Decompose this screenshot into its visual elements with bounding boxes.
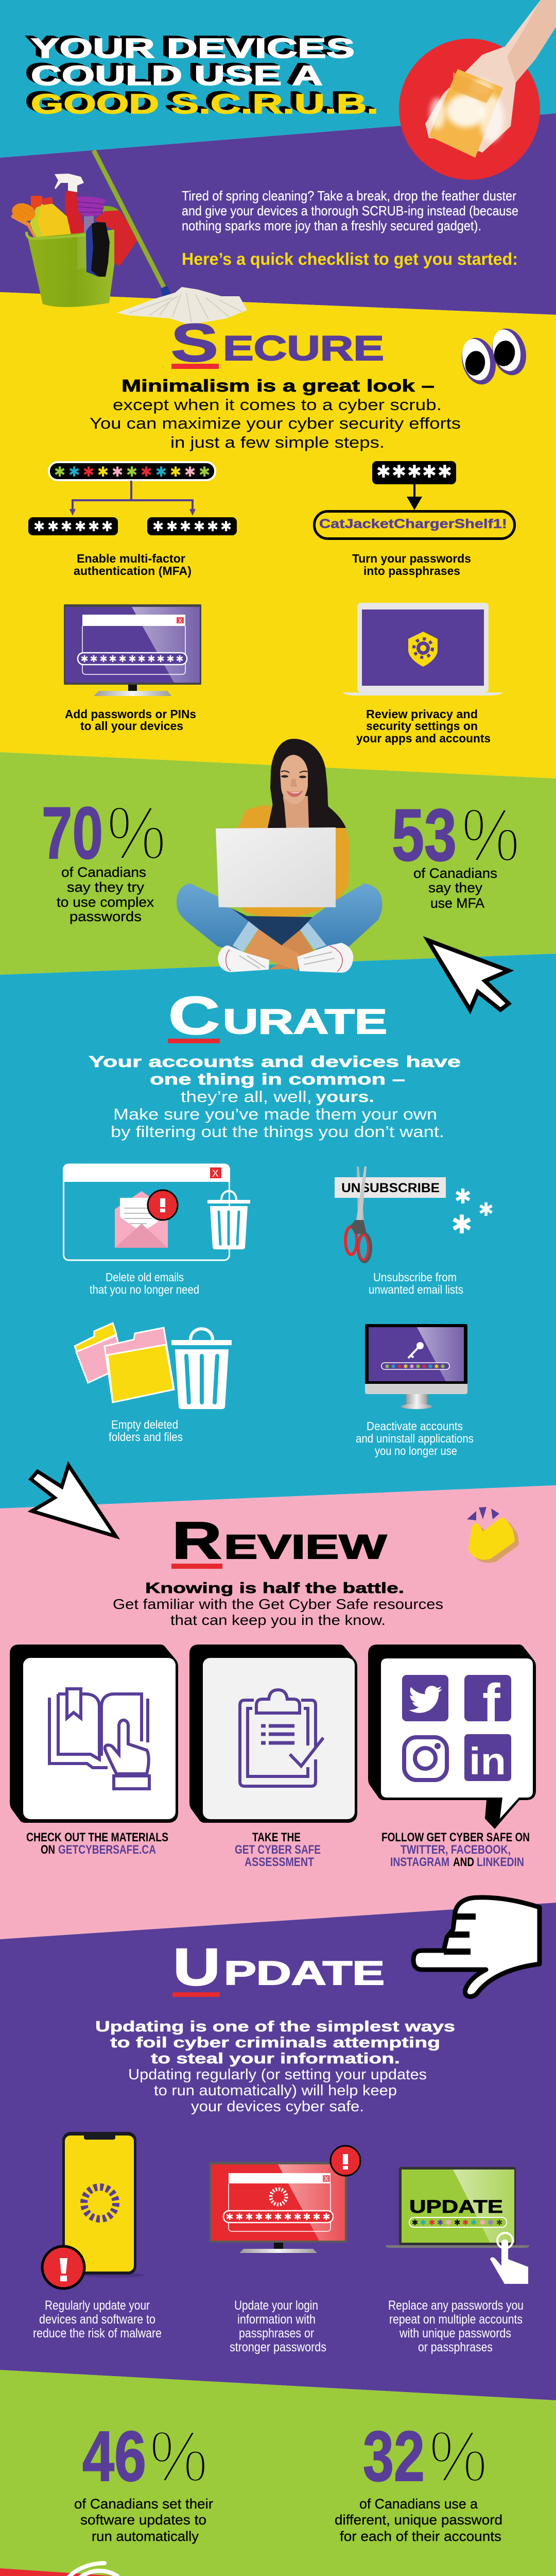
curate intro text: one thing in common – — [150, 1070, 405, 1088]
heading: secure: ECURE — [223, 329, 384, 368]
label: update login: information with — [237, 2312, 316, 2327]
icon: facebook — [464, 1673, 511, 1733]
label: assessment: GET CYBER SAFE — [235, 1843, 321, 1857]
heading: secure — [171, 313, 384, 373]
card: assessment clipboard — [189, 1645, 357, 1823]
label: delete old emails — [90, 1270, 199, 1296]
stat: 53 percent: % — [461, 793, 520, 878]
label: materials: CHECK OUT THE MATERIALS — [26, 1831, 168, 1844]
update intro text: your devices cyber safe. — [191, 2098, 364, 2115]
icon: scissors cutting unsubscribe: ✱ — [451, 1210, 473, 1240]
stat: 53 percent: 53 — [392, 794, 457, 876]
stat: 32 percent — [335, 2416, 502, 2544]
icon: fingerprint — [61, 2563, 145, 2576]
label: deactivate accounts: Deactivate accounts — [367, 1419, 463, 1433]
label: update login: passphrases or — [239, 2326, 314, 2341]
icon: laptop with update and touch hand: UPDATE — [409, 2197, 503, 2217]
secure intro text: in just a few simple steps. — [170, 433, 385, 451]
illustration: woman sitting with laptop — [177, 739, 383, 973]
icon: password to passphrase: CatJacketChargerShelf1! — [319, 517, 507, 531]
curate intro text: Make sure you’ve made them your own — [113, 1105, 437, 1123]
heading: review — [171, 1511, 387, 1570]
icon: multi-factor authentication — [28, 462, 237, 535]
label: follow on social — [381, 1831, 530, 1869]
label: unsubscribe: unwanted email lists — [369, 1283, 463, 1296]
label: update devices: reduce the risk of malware — [33, 2326, 162, 2341]
label: materials: ON — [41, 1843, 55, 1857]
label: empty folders: Empty deleted — [111, 1418, 178, 1431]
heading: curate: C — [168, 986, 220, 1046]
icon: linkedin: in — [469, 1740, 506, 1783]
stat: 70 percent: to use complex — [57, 894, 154, 910]
icon: password to passphrase: ✱✱✱✱✱ — [376, 462, 452, 482]
icon: pointing hand — [413, 1897, 540, 1996]
stat: 53 percent: use MFA — [430, 895, 484, 911]
icon: delete email window with trash: X — [212, 1168, 219, 1179]
icon: clipboard with check — [240, 1690, 323, 1786]
panel: curate — [63, 986, 494, 1458]
heading: secure: S — [171, 313, 218, 373]
intro callout: Here’s a quick checklist to get you started: — [182, 249, 518, 268]
label: review privacy — [356, 707, 491, 745]
illustration: mop — [94, 150, 247, 325]
label: review privacy: Review privacy and — [366, 707, 478, 721]
stat: 70 percent — [42, 791, 166, 924]
label: assessment: ASSESSMENT — [245, 1855, 314, 1869]
stat: 32 percent: different, unique password — [335, 2512, 502, 2528]
stat: 70 percent: % — [107, 791, 166, 876]
stat: 32 percent: of Canadians use a — [359, 2496, 478, 2512]
label: replace passwords: with unique passwords — [399, 2326, 511, 2341]
label: follow on social: INSTAGRAM — [390, 1855, 449, 1869]
icon: twitter — [402, 1675, 448, 1721]
stat: 46 percent: % — [149, 2416, 208, 2498]
label: add passwords — [65, 707, 196, 733]
illustration: bucket of cleaning supplies — [10, 174, 141, 307]
label: follow on social: TWITTER, FACEBOOK, — [401, 1843, 511, 1857]
label: update login: stronger passwords — [230, 2340, 326, 2354]
curate intro text: yours. — [316, 1088, 374, 1106]
update intro text: Updating regularly (or setting your updates — [128, 2066, 427, 2083]
label: passphrases: into passphrases — [363, 564, 460, 578]
heading: update: U — [173, 1938, 220, 1996]
stat: 70 percent: of Canadians — [61, 865, 146, 880]
stat: 53 percent — [392, 793, 520, 911]
icon: laptop with security shield — [342, 603, 503, 696]
stat: 32 percent: % — [429, 2416, 488, 2498]
icon: scissors cutting unsubscribe: ✱ — [478, 1199, 494, 1221]
stat: 46 percent: run automatically — [92, 2529, 199, 2544]
icon: cursor arrow — [428, 940, 509, 1010]
label: deactivate accounts: you no longer use — [375, 1444, 457, 1458]
label: assessment — [235, 1831, 321, 1869]
icon: googly eyes — [457, 325, 531, 388]
heading: update: PDATE — [224, 1954, 385, 1992]
title: GOOD S.C.R.U.B. — [31, 89, 378, 120]
icon: folders and trash can — [75, 1323, 232, 1409]
stat: 70 percent: say they try — [67, 879, 145, 895]
label: passphrases — [352, 552, 471, 578]
heading: curate: URATE — [223, 1002, 387, 1041]
intro text: and give your devices a thorough SCRUB-ing instead (because — [182, 203, 518, 218]
secure intro text: except when it comes to a cyber scrub. — [113, 396, 442, 414]
heading: review: R — [172, 1511, 222, 1570]
review intro text: that can keep you in the know. — [170, 1612, 386, 1628]
panel: block — [61, 2563, 461, 2576]
icon: multi-factor authentication: ✱✱✱✱✱✱ — [152, 519, 232, 535]
title: YOUR DEVICES — [31, 33, 355, 64]
label: add passwords: to all your devices — [80, 719, 183, 733]
panel: review — [10, 1465, 536, 1869]
stat: 70 percent: passwords — [70, 909, 142, 924]
label: update devices: devices and software to — [39, 2312, 155, 2327]
stat: 70 percent: 70 — [42, 792, 103, 874]
card: social media speech bubble — [368, 1645, 536, 1829]
label: review privacy: security settings on — [366, 719, 478, 733]
curate intro text: Your accounts and devices have — [89, 1053, 461, 1071]
label: empty folders: folders and files — [109, 1430, 183, 1444]
heading: update — [172, 1938, 385, 1997]
icon: password to passphrase — [314, 461, 515, 539]
label: replace passwords: Replace any passwords you — [388, 2298, 524, 2313]
label: replace passwords: or passphrases — [418, 2340, 493, 2354]
stat: 32 percent: 32 — [363, 2417, 425, 2496]
icon: monitor with password window: X — [178, 617, 182, 624]
icon: desktop computer with key — [365, 1324, 467, 1409]
secure intro text: Minimalism is a great look – — [121, 376, 435, 395]
icon: delete email window with trash — [63, 1164, 250, 1260]
curate intro text — [89, 1053, 461, 1141]
icon: scissors cutting unsubscribe: UNSUBSCRIBE — [341, 1181, 440, 1195]
label: enable MFA — [74, 552, 192, 578]
label: deactivate accounts — [356, 1419, 474, 1458]
heading: curate — [168, 986, 387, 1046]
stat: 46 percent — [74, 2416, 213, 2544]
panel: update — [33, 1897, 540, 2354]
icon: multi-factor authentication: ✱✱✱✱✱✱✱✱✱✱✱ — [54, 464, 210, 480]
icon: linkedin — [464, 1734, 511, 1783]
curate intro text: they’re all, well, — [181, 1088, 312, 1106]
heading: review: EVIEW — [224, 1528, 387, 1566]
icon: monitor with login update — [209, 2146, 360, 2253]
icon: instagram — [404, 1737, 447, 1780]
icon: clapping hands — [467, 1507, 515, 1559]
label: deactivate accounts: and uninstall applications — [356, 1432, 474, 1445]
stat: 53 percent: say they — [428, 880, 483, 895]
label: delete old emails: that you no longer need — [90, 1283, 199, 1296]
label: follow on social: LINKEDIN — [477, 1855, 524, 1869]
label: unsubscribe: Unsubscribe from — [373, 1270, 457, 1284]
review intro text: Get familiar with the Get Cyber Safe resources — [113, 1596, 443, 1612]
curate intro text: by filtering out the things you don’t want. — [111, 1123, 444, 1141]
update intro text: to steal your information. — [151, 2050, 400, 2067]
label: unsubscribe — [369, 1270, 463, 1296]
icon: laptop with update and touch hand — [386, 2167, 529, 2284]
review intro text — [113, 1580, 443, 1628]
update intro text: to foil cyber criminals attempting — [110, 2035, 440, 2051]
icon: multi-factor authentication: ✱✱✱✱✱✱ — [33, 519, 113, 535]
icon: cursor arrow pointing down right — [31, 1465, 116, 1536]
update intro text: to run automatically) will help keep — [154, 2082, 397, 2099]
illustration: hand holding soapy sponge on red circle — [399, 0, 556, 180]
stat: 46 percent: software updates to — [80, 2512, 206, 2528]
label: replace passwords: repeat on multiple accounts — [389, 2312, 523, 2327]
stat: 46 percent: of Canadians set their — [74, 2496, 213, 2512]
label: update devices: Regularly update your — [45, 2298, 150, 2313]
icon: monitor with login update: ✱✱✱✱✱✱✱✱✱✱✱ — [225, 2212, 331, 2223]
stat: 46 percent: 46 — [82, 2417, 146, 2496]
icon: scissors cutting unsubscribe: ✱ — [454, 1185, 472, 1209]
label: enable MFA: authentication (MFA) — [74, 564, 192, 578]
intro text — [182, 188, 518, 233]
icon: facebook: f — [482, 1673, 500, 1733]
title — [31, 33, 378, 120]
label: materials: GETCYBERSAFE.CA — [58, 1843, 156, 1857]
label: update devices — [33, 2298, 162, 2341]
label: empty folders — [109, 1418, 183, 1444]
icon: monitor with login update: X — [324, 2175, 328, 2182]
stat: 32 percent: for each of their accounts — [340, 2529, 501, 2544]
label: update login: Update your login — [234, 2298, 318, 2313]
icon: book with pointing hand — [49, 1689, 149, 1789]
label: review privacy: your apps and accounts — [356, 732, 491, 745]
update intro text: Updating is one of the simplest ways — [95, 2019, 455, 2035]
secure intro text — [90, 376, 461, 451]
intro text: nothing sparks more joy than a freshly secured gadget). — [182, 218, 481, 233]
label: follow on social: AND — [453, 1855, 474, 1869]
label: update login — [230, 2298, 326, 2354]
review intro text: Knowing is half the battle. — [145, 1580, 404, 1597]
card: materials book — [10, 1645, 178, 1823]
secure intro text: You can maximize your cyber security efforts — [90, 414, 461, 432]
icon: desktop computer with key: ✱ ✱ ✱ ✱ ✱ ✱ ✱ ✱ ✱ ✱ — [385, 1363, 445, 1370]
label: assessment: TAKE THE — [252, 1831, 301, 1844]
intro text: Tired of spring cleaning? Take a break, drop the feather duster — [182, 188, 516, 204]
label: enable MFA: Enable multi-factor — [77, 552, 185, 565]
update intro text — [95, 2019, 455, 2115]
label: passphrases: Turn your passwords — [352, 552, 471, 565]
icon: scissors cutting unsubscribe — [335, 1166, 494, 1262]
icon: phone with spinner and alert — [42, 2132, 144, 2289]
panel: secure — [28, 313, 531, 745]
label: add passwords: Add passwords or PINs — [65, 707, 196, 721]
title: COULD USE A — [31, 60, 323, 91]
label: replace passwords — [388, 2298, 524, 2354]
icon: monitor with password window: ✱✱✱✱✱✱✱✱✱✱✱ — [80, 654, 184, 665]
label: delete old emails: Delete old emails — [106, 1270, 184, 1284]
stat: 53 percent: of Canadians — [413, 866, 497, 881]
icon: laptop with update and touch hand: ✱✱ ✱✱✱ ✱✱✱ ✱✱ ✱ — [412, 2218, 502, 2227]
label: materials — [26, 1831, 168, 1857]
icon: monitor with password window — [64, 604, 201, 696]
